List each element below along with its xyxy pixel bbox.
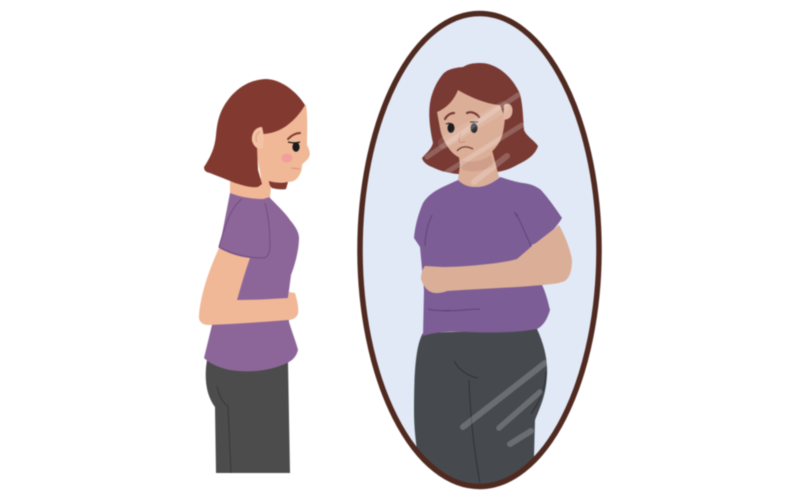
reflection: distorted figure (414, 63, 572, 495)
head and face (204, 79, 310, 189)
reflected nose (459, 133, 465, 142)
reflected face (437, 90, 513, 160)
reflected arm across waist (421, 225, 572, 293)
reflected eyes (448, 123, 454, 133)
shirt (204, 190, 299, 371)
trousers (206, 360, 290, 473)
reflected back arm (419, 240, 440, 285)
eye (292, 142, 300, 152)
neck (230, 178, 272, 199)
reflected chin shadow (461, 155, 494, 171)
hair tip under chin (269, 181, 288, 189)
reflected mouth (457, 147, 473, 151)
sleeve seam (219, 199, 270, 258)
reflected trousers (414, 329, 547, 495)
mouth (291, 168, 300, 169)
mirror frame (360, 14, 599, 486)
eyebrow (288, 133, 300, 139)
reflected hair (422, 63, 538, 174)
mirror glare streaks (427, 95, 545, 444)
mirror glass (360, 14, 598, 486)
reflected neck (458, 150, 499, 187)
arm (199, 248, 298, 325)
cheek (282, 154, 292, 162)
reflected ear (503, 104, 513, 120)
figure: woman in profile (199, 79, 310, 473)
illustration: woman looking in a mirror (198, 10, 603, 490)
mirror (360, 14, 599, 495)
reflected shirt (414, 177, 562, 336)
face (256, 105, 310, 183)
ear (252, 127, 264, 149)
reflected eyebrows (445, 112, 479, 119)
hair (204, 79, 305, 187)
